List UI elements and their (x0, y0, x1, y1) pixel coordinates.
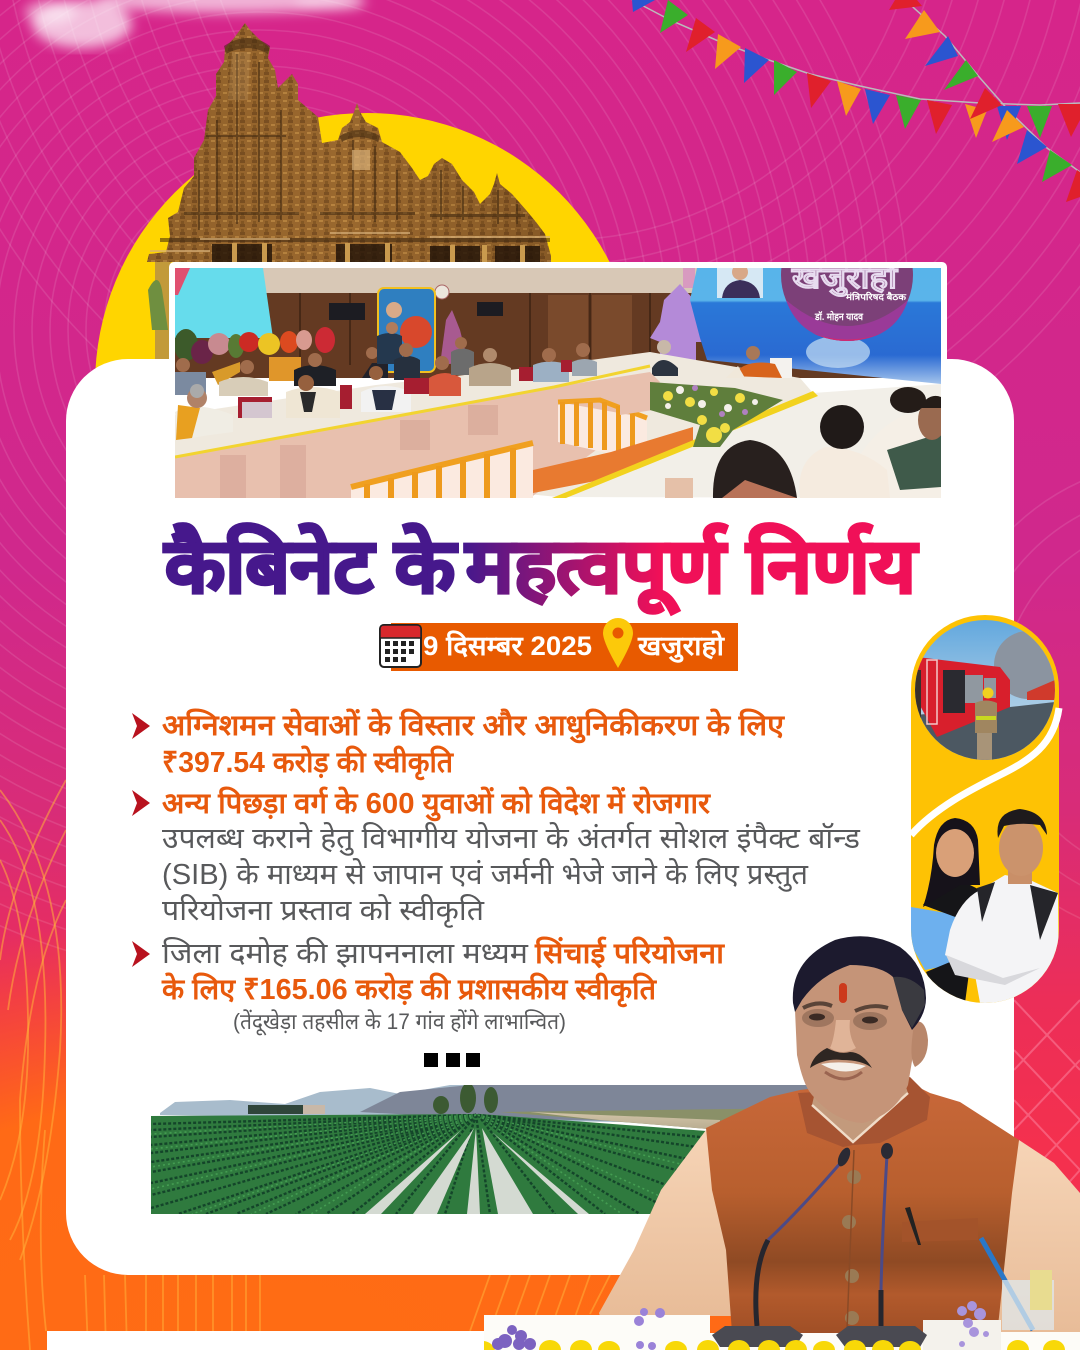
bottom white strip (47, 1331, 487, 1350)
icon: bullet chevron (132, 790, 150, 816)
microphones (756, 1143, 893, 1326)
table back (175, 352, 813, 497)
pencil holder (981, 1238, 1054, 1330)
side capsule: beneficiaries (911, 615, 1062, 1003)
icon: calendar (380, 625, 421, 667)
meeting photo: खजुराहो (791, 260, 898, 297)
collar (798, 1077, 930, 1147)
icon: bullet chevron (132, 713, 150, 739)
orange rug and white right table (533, 427, 693, 493)
three squares (424, 1053, 480, 1067)
title: कैबिनेट के (163, 523, 457, 608)
flower band (484, 1301, 1080, 1350)
vest buttons and pocket (842, 1150, 978, 1330)
vest (706, 1078, 1019, 1333)
temple (147, 23, 551, 360)
seated officials (175, 322, 792, 440)
decision 2: अन्य पिछड़ा वर्ग के 600 युवाओं को विदेश में रोजगार (162, 786, 711, 822)
decision 2: उपलब्ध कराने हेतु विभागीय योजना के अंतर्गत सोशल इंपैक्ट बॉन्ड (162, 822, 860, 856)
farm photo (151, 1083, 811, 1214)
head (793, 936, 928, 1123)
title: महत्वपूर्ण निर्णय (464, 523, 919, 615)
decision 2: परियोजना प्रस्ताव को स्वीकृति (162, 894, 484, 928)
flower arrangement back-left (174, 327, 335, 385)
decision 2: (SIB) के माध्यम से जापान एवं जर्मनी भेजे जाने के लिए प्रस्तुत (162, 858, 808, 892)
bunting flags (632, 0, 1080, 202)
decision 1 (132, 708, 785, 781)
decision 3: जिला दमोह की झापननाला मध्यम (162, 937, 529, 970)
decision 3: (तेंदूखेड़ा तहसील के 17 गांव होंगे लाभान्वित) (233, 1009, 566, 1036)
meeting photo (169, 262, 947, 498)
decision 3: के लिए ₹165.06 करोड़ की प्रशासकीय स्वीकृति (161, 972, 657, 1008)
left screen (175, 268, 273, 338)
centre flowers (650, 382, 783, 447)
chief minister figure (484, 936, 1080, 1350)
white swoosh (911, 708, 1059, 835)
white content card (66, 359, 1014, 1275)
big blue screen (690, 268, 941, 384)
pink temple-print table drape (175, 372, 660, 498)
decision 2 (132, 786, 860, 928)
purple temple model (683, 268, 695, 288)
neck (812, 1070, 908, 1142)
garlands (351, 400, 647, 498)
tilak (839, 983, 847, 1003)
students (911, 809, 1059, 1003)
cloud (24, 0, 366, 48)
date and location bar: खजुराहो (637, 630, 725, 663)
meeting photo: डॉ. मोहन यादव (814, 310, 863, 323)
decision 1: अग्निशमन सेवाओं के विस्तार और आधुनिकीकरण के लिए (162, 708, 785, 744)
date and location bar: 9 दिसम्बर 2025 (423, 630, 592, 661)
speakers and clock (329, 302, 503, 320)
icon: bullet chevron (132, 941, 150, 967)
icon: location pin (603, 618, 633, 668)
title (163, 523, 919, 615)
meeting photo: मंत्रिपरिषद बैठक (845, 291, 907, 302)
kurta (599, 1130, 745, 1316)
decision 3 (132, 936, 726, 1036)
foreground officials right (860, 410, 941, 498)
standee (378, 288, 435, 372)
date and location bar (380, 618, 738, 671)
decision 3: सिंचाई परियोजना (534, 936, 726, 970)
decision 1: ₹397.54 करोड़ की स्वीकृति (162, 745, 454, 781)
yellow sun circle (95, 113, 639, 657)
fire engine photo (915, 620, 1062, 760)
